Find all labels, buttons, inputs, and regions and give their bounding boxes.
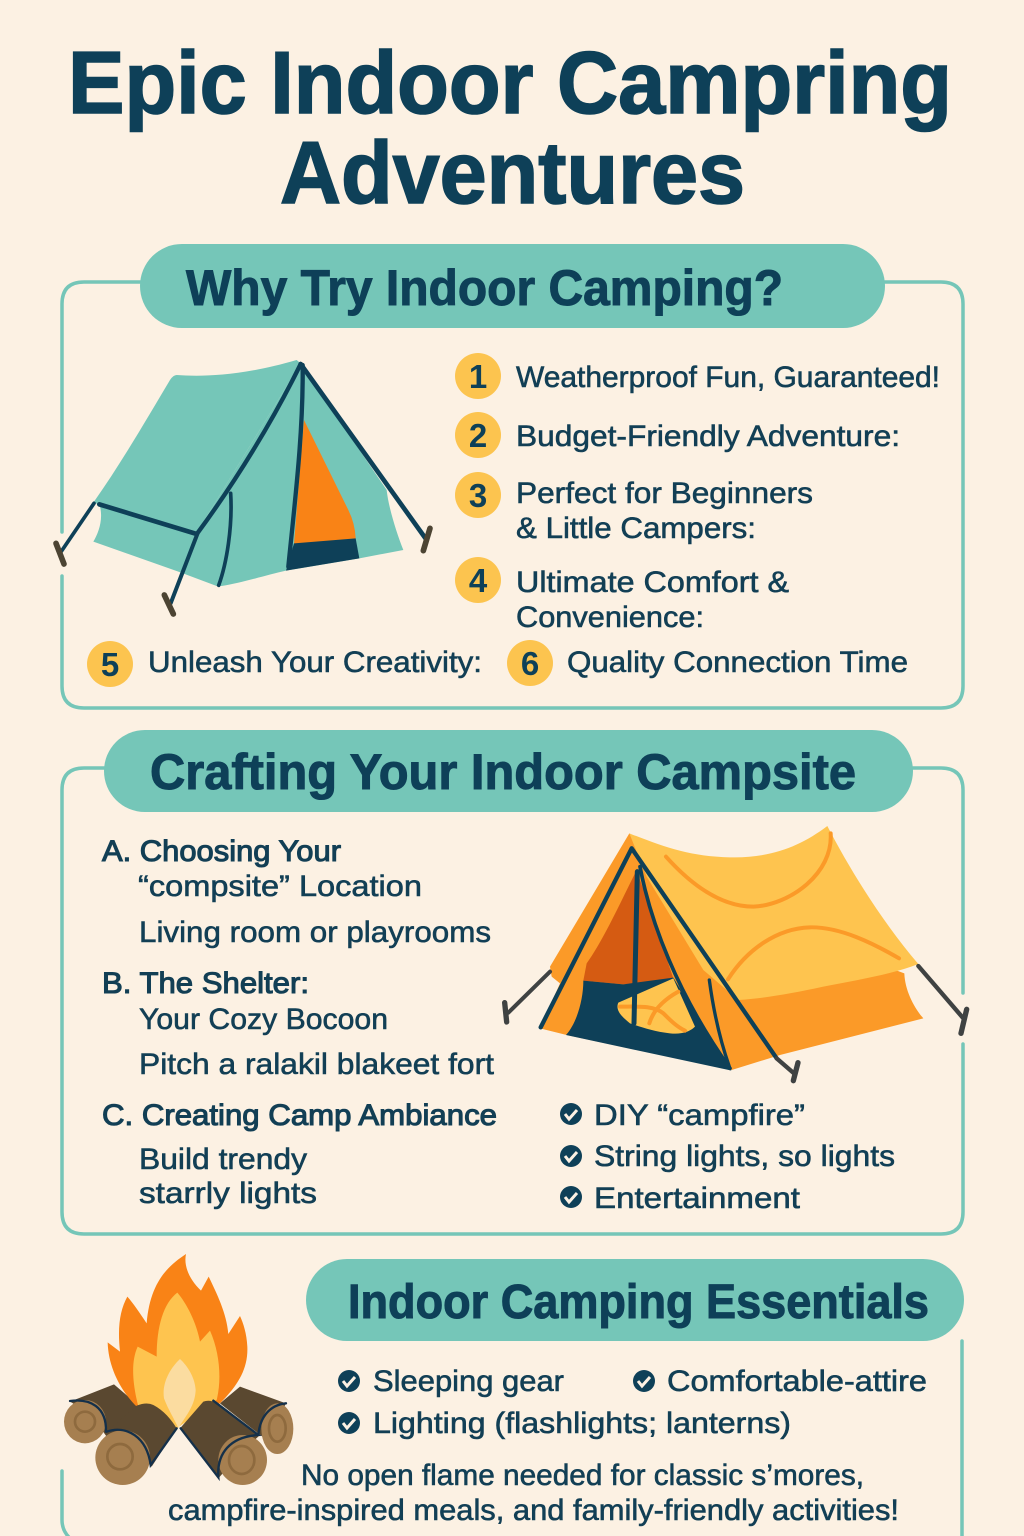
closing note: campfire-inspired meals, and family-friendly activities! — [168, 1494, 899, 1527]
title — [68, 33, 952, 222]
text block: the shelter: Pitch a ralakil blakeet fort — [139, 1048, 495, 1081]
item 1: Weatherproof Fun, Guaranteed! — [516, 361, 940, 394]
checklist: essentials: Lighting (flashlights; lanterns) — [373, 1407, 791, 1440]
icon: orange tent — [505, 826, 967, 1081]
text block: choosing location: Living room or playrooms — [139, 916, 491, 949]
item 1: 1 — [469, 358, 487, 395]
text block: camp ambiance — [102, 1099, 497, 1210]
text block: the shelter: B. The Shelter: — [102, 967, 309, 1000]
text block: the shelter: Your Cozy Bocoon — [139, 1003, 388, 1036]
text block: camp ambiance: C. Creating Camp Ambiance — [102, 1099, 497, 1132]
icon: campfire — [64, 1254, 293, 1485]
title: Epic Indoor Campring — [68, 33, 952, 132]
item 2 — [455, 412, 900, 458]
heading: why try indoor camping — [140, 244, 885, 328]
text block: camp ambiance: starrly lights — [139, 1177, 317, 1210]
item 4: 4 — [469, 562, 488, 599]
checklist: ambiance: String lights, so lights — [594, 1140, 895, 1173]
text block: choosing location: “compsite” Location — [138, 870, 422, 903]
item 3: & Little Campers: — [516, 512, 756, 545]
item 1 — [455, 353, 940, 399]
item 2: 2 — [469, 417, 487, 454]
item 6 — [507, 640, 908, 686]
text block: camp ambiance: Build trendy — [139, 1143, 307, 1176]
item 6: 6 — [521, 645, 539, 682]
item 4 — [455, 557, 789, 634]
text block: the shelter — [102, 967, 495, 1081]
panel: indoor camping essentials — [62, 1254, 964, 1536]
item 4: Ultimate Comfort & — [516, 566, 789, 599]
checklist: ambiance: DIY “campfire” — [594, 1099, 805, 1132]
heading: crafting your indoor campsite: Crafting Your Indoor Campsite — [150, 744, 856, 800]
closing note — [168, 1459, 899, 1527]
closing note: No open flame needed for classic s’mores, — [301, 1459, 864, 1492]
title: Adventures — [280, 123, 745, 222]
checklist: essentials — [338, 1365, 927, 1440]
text block: choosing location — [102, 835, 491, 949]
panel: crafting your indoor campsite — [62, 730, 967, 1234]
panel: why try indoor camping — [56, 244, 963, 708]
item 4: Convenience: — [516, 601, 704, 634]
heading: why try indoor camping: Why Try Indoor Camping? — [186, 260, 783, 316]
checklist: ambiance: Entertainment — [594, 1182, 801, 1215]
icon: teal tent — [56, 360, 430, 614]
text block: choosing location: A. Choosing Your — [102, 835, 341, 868]
checklist: essentials: Sleeping gear — [373, 1365, 564, 1398]
item 5: Unleash Your Creativity: — [148, 646, 482, 679]
checklist: essentials: Comfortable-attire — [667, 1365, 927, 1398]
heading: crafting your indoor campsite — [104, 730, 913, 812]
item 5 — [87, 641, 482, 687]
item 3 — [455, 472, 813, 545]
item 3: 3 — [469, 477, 487, 514]
item 3: Perfect for Beginners — [516, 477, 813, 510]
heading: indoor camping essentials: Indoor Camping Essentials — [348, 1276, 929, 1329]
item 5: 5 — [101, 646, 119, 683]
item 6: Quality Connection Time — [567, 646, 908, 679]
checklist: ambiance — [560, 1099, 895, 1215]
heading: indoor camping essentials — [306, 1259, 964, 1341]
item 2: Budget-Friendly Adventure: — [516, 420, 900, 453]
